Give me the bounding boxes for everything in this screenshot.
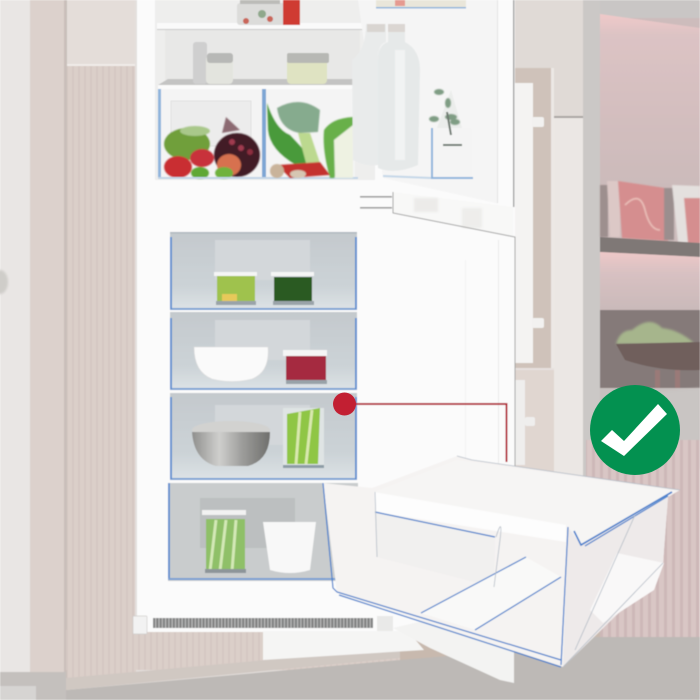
drawer right side [563, 497, 668, 667]
freezer drawer 4 [168, 483, 358, 581]
drawer top interior [374, 460, 672, 545]
removable drawer [323, 456, 680, 683]
tub: raspberries [283, 350, 327, 384]
fridge body [133, 0, 515, 634]
books [600, 181, 700, 243]
fridge door open [352, 0, 514, 207]
background: floor [0, 630, 700, 700]
door shelf top [376, 0, 466, 8]
glass bottles [352, 24, 420, 171]
tub: salad [214, 272, 257, 305]
background: cabinets right of fridge [514, 0, 585, 700]
vegetable drawers [158, 89, 358, 179]
ventilation grille [153, 618, 373, 628]
tub: green beans [271, 272, 314, 305]
freezer drawer 2 [170, 312, 357, 390]
drawer clear edges [375, 456, 680, 667]
drawer floor panel [421, 557, 561, 630]
blue divider [158, 89, 161, 178]
dark niche with salad bowl [600, 310, 700, 388]
upper jar on top shelf [237, 0, 285, 25]
red bottle [283, 0, 300, 25]
background: pink shelving unit [586, 0, 700, 700]
drawer support behind [393, 610, 514, 683]
drawer pocket [375, 512, 495, 587]
drawer front rim [374, 492, 566, 542]
white bowl [194, 347, 268, 382]
green check badge [590, 385, 680, 475]
lower door blue rail [383, 175, 431, 179]
pak choi and peppers [267, 102, 353, 178]
connector line [344, 404, 506, 462]
hinges [360, 196, 392, 209]
fridge compartment interior [155, 0, 375, 180]
drawer body [323, 456, 680, 667]
tub: celery [283, 408, 324, 468]
door bin with plant [429, 89, 473, 179]
freezer door open [393, 192, 515, 470]
drawer inner highlight [590, 553, 664, 623]
top shelf [157, 23, 372, 30]
ribbed lower cabinet [586, 440, 700, 637]
freezer drawer 1 [170, 232, 357, 310]
fruit: grapes, apples, dark grapes [164, 117, 260, 179]
middle shelf [158, 79, 356, 85]
background: dark pillar [583, 0, 600, 700]
jar left [206, 53, 233, 84]
white cup [263, 522, 316, 573]
blue edges [323, 483, 672, 667]
jar right [287, 53, 329, 84]
plinth panel [263, 631, 424, 660]
tub: celery [202, 510, 246, 573]
red marker dot [333, 392, 356, 416]
freezer drawer 3 [170, 393, 357, 480]
small bottle [193, 42, 207, 84]
steel bowl [192, 421, 270, 439]
shelf [600, 237, 700, 257]
